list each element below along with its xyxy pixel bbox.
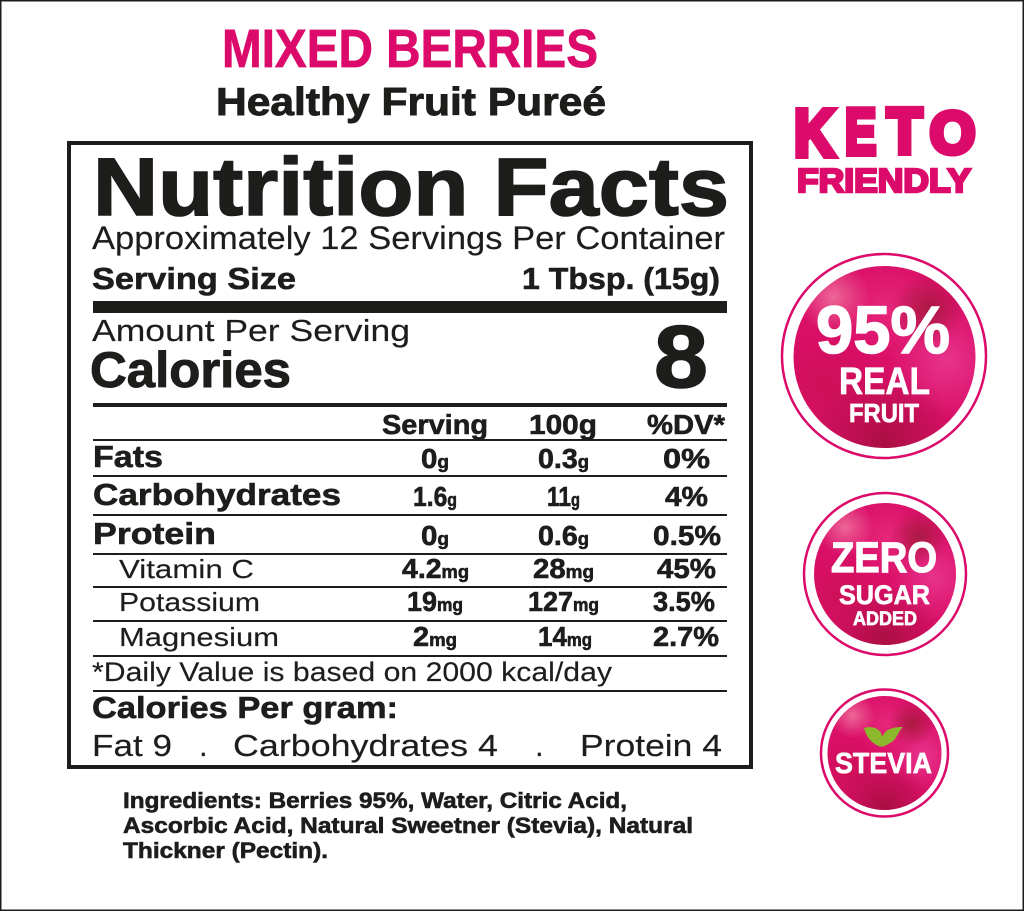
row: protein xyxy=(93,516,721,551)
table header: %DV* xyxy=(647,409,725,440)
badge: 95% real fruit: 95% xyxy=(816,293,950,368)
keto friendly: K xyxy=(794,97,835,171)
keto friendly xyxy=(794,95,975,199)
row: protein: 0.5% xyxy=(653,520,721,551)
keto friendly: T xyxy=(887,95,922,167)
row: potassium xyxy=(119,586,715,617)
calories per gram xyxy=(92,690,722,763)
row: potassium: 19mg xyxy=(407,586,463,617)
title xyxy=(216,19,606,124)
row: carbohydrates: 1.6g xyxy=(413,481,457,512)
row: fats: 0.3g xyxy=(538,443,589,474)
footnote: *Daily Value is based on 2000 kcal/day xyxy=(92,657,613,687)
row: magnesium: 14mg xyxy=(538,621,592,652)
serving size: 1 Tbsp. (15g) xyxy=(522,261,720,296)
panel: nutrition facts xyxy=(69,142,751,767)
ingredients: Ascorbic Acid, Natural Sweetner (Stevia), Natural xyxy=(123,813,693,838)
row: vitamin c: 45% xyxy=(657,553,716,584)
ingredients xyxy=(123,788,693,863)
row: magnesium: 2.7% xyxy=(653,621,719,652)
servings per container: Approximately 12 Servings Per Container xyxy=(92,220,725,256)
row: carbohydrates xyxy=(93,477,708,512)
row: potassium: Potassium xyxy=(119,587,260,617)
serving size xyxy=(92,261,720,296)
keto friendly: O xyxy=(930,101,975,166)
calories per gram: Fat 9 xyxy=(92,728,172,763)
badge: stevia: STEVIA xyxy=(835,748,932,780)
row: vitamin c: Vitamin C xyxy=(119,554,254,584)
calories: 8 xyxy=(654,307,708,406)
row: magnesium: Magnesium xyxy=(119,622,279,652)
row: fats: 0g xyxy=(421,443,449,474)
badge: 95% real fruit xyxy=(782,254,986,458)
row: potassium: 3.5% xyxy=(653,586,715,617)
calories: Amount Per Serving xyxy=(92,313,410,348)
badge: zero sugar added: SUGAR xyxy=(839,580,930,610)
table header: 100g xyxy=(529,409,597,440)
badge: 95% real fruit: FRUIT xyxy=(849,398,919,428)
calories per gram: Protein 4 xyxy=(580,728,722,763)
row: potassium: 127mg xyxy=(528,586,599,617)
row: magnesium: 2mg xyxy=(413,621,457,652)
keto friendly: FRIENDLY xyxy=(797,162,971,199)
ingredients: Thickner (Pectin). xyxy=(123,838,328,863)
row: vitamin c: 4.2mg xyxy=(402,553,469,584)
calories per gram: Calories Per gram: xyxy=(92,690,398,725)
row: carbohydrates: 4% xyxy=(665,481,708,512)
title: MIXED BERRIES xyxy=(222,19,598,79)
row: fats: Fats xyxy=(93,439,163,474)
row: vitamin c: 28mg xyxy=(533,553,594,584)
badge: zero sugar added xyxy=(804,493,966,655)
row: fats xyxy=(93,439,710,474)
row: fats: 0% xyxy=(663,443,710,474)
calories xyxy=(90,307,708,406)
row: carbohydrates: Carbohydrates xyxy=(93,477,341,512)
keto friendly: E xyxy=(845,97,876,169)
row: magnesium xyxy=(119,621,719,652)
table header: Serving xyxy=(382,409,488,440)
table header xyxy=(382,409,725,440)
row: protein: 0.6g xyxy=(538,520,589,551)
row: protein: Protein xyxy=(93,516,216,551)
calories per gram: . xyxy=(199,728,208,763)
row: carbohydrates: 11g xyxy=(547,481,580,512)
calories per gram: Carbohydrates 4 xyxy=(233,728,498,763)
badge: zero sugar added: ADDED xyxy=(853,609,917,630)
calories: Calories xyxy=(90,342,291,398)
heading: nutrition facts: Nutrition Facts xyxy=(93,142,729,233)
badge: stevia xyxy=(821,690,948,816)
row: vitamin c xyxy=(119,553,716,584)
row: protein: 0g xyxy=(421,520,449,551)
ingredients: Ingredients: Berries 95%, Water, Citric Acid, xyxy=(123,788,627,813)
badge: zero sugar added: ZERO xyxy=(831,534,937,582)
badge: 95% real fruit: REAL xyxy=(839,361,930,403)
serving size: Serving Size xyxy=(92,261,296,296)
title: Healthy Fruit Pureé xyxy=(216,81,606,124)
icon: leaves xyxy=(864,727,903,747)
calories per gram: . xyxy=(535,728,544,763)
